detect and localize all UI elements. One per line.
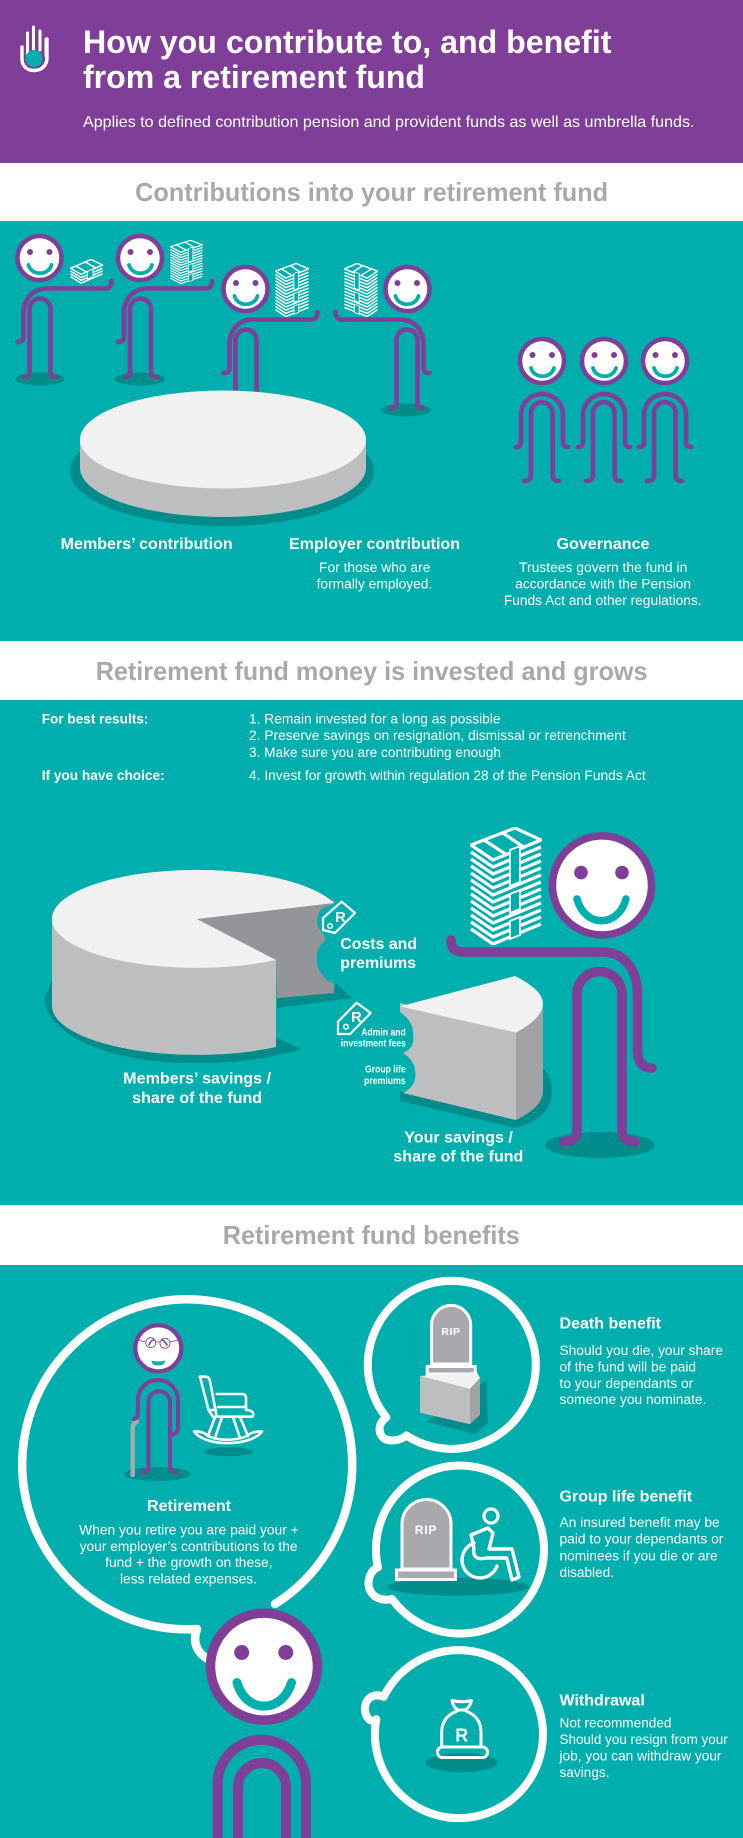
text: death benefit	[560, 1316, 723, 1407]
speech bubble: retirement	[22, 1299, 352, 1660]
label: governance: Funds Act and other regulations.	[504, 593, 702, 608]
person: employer two with money stack	[336, 263, 431, 416]
speech bubble: withdrawal	[365, 1650, 543, 1818]
label: governance: accordance with the Pension	[515, 576, 691, 592]
title: How you contribute to, and benefit	[83, 24, 612, 60]
chart: fund disk	[70, 390, 374, 526]
label: costs and premiums: Costs and	[340, 936, 417, 953]
text: withdrawal: Not recommended	[560, 1715, 672, 1730]
tips list: 1. Remain invested for a long as possible	[249, 712, 500, 726]
text: withdrawal: job, you can withdraw your	[558, 1749, 722, 1764]
label: group life premiums: premiums	[364, 1076, 406, 1087]
text: withdrawal: Should you resign from your	[560, 1732, 728, 1747]
governance trustees	[516, 339, 691, 481]
text: retirement: When you retire you are paid your +	[79, 1522, 299, 1537]
icon: price tag two	[338, 1003, 371, 1034]
label: group life premiums: Group life	[365, 1065, 406, 1076]
tips list: If you have choice:	[42, 767, 165, 783]
text: retirement: your employer’s contributions to the	[80, 1539, 298, 1554]
person: employer one with money stack	[224, 263, 318, 408]
speech bubble: group life benefit	[369, 1466, 544, 1634]
icon: tombstone and wheelchair	[388, 1499, 529, 1596]
icon: price tag one: R	[335, 909, 346, 926]
text: group life benefit: nominees if you die or are	[560, 1548, 718, 1563]
panel: investment	[0, 700, 743, 1205]
title	[83, 24, 612, 95]
icon: hand logo	[22, 27, 47, 70]
retired person	[124, 1325, 190, 1481]
text: withdrawal	[558, 1692, 728, 1780]
text: group life benefit: paid to your dependants or	[560, 1532, 724, 1547]
text: retirement: fund + the growth on these,	[105, 1555, 272, 1570]
label: governance	[504, 536, 702, 608]
label: members' savings: share of the fund	[132, 1090, 262, 1107]
text: group life benefit	[560, 1488, 724, 1580]
icon: tombstone and wheelchair: RIP	[415, 1523, 437, 1537]
label: your savings: Your savings /	[404, 1130, 513, 1147]
text: withdrawal: savings.	[560, 1765, 610, 1780]
heading: benefits: Retirement fund benefits	[223, 1220, 520, 1250]
label: governance: Governance	[556, 536, 650, 553]
text: retirement	[79, 1498, 299, 1587]
label: members' savings	[123, 1070, 272, 1107]
label: costs and premiums: premiums	[340, 955, 416, 972]
label: admin and investment fees: Admin and	[361, 1028, 406, 1038]
chart: members' savings pie	[44, 870, 352, 1063]
speech bubble: death benefit	[368, 1281, 536, 1449]
label: employer contribution	[289, 536, 460, 592]
tips list	[42, 710, 646, 783]
person: large narrator	[210, 1613, 318, 1838]
label: members' savings: Members’ savings /	[123, 1070, 272, 1088]
label: group life premiums	[364, 1065, 406, 1087]
text: group life benefit: disabled.	[560, 1565, 614, 1580]
text: death benefit: someone you nominate.	[560, 1392, 706, 1407]
text: group life benefit: Group life benefit	[560, 1488, 693, 1506]
label: governance: Trustees govern the fund in	[519, 560, 687, 575]
text: group life benefit: An insured benefit may be	[560, 1515, 720, 1530]
person: member two with money stack	[115, 236, 212, 386]
panel: contributions	[0, 221, 743, 641]
label: admin and investment fees: investment fees	[341, 1038, 406, 1049]
icon: money bag: R	[455, 1726, 468, 1746]
icon: price tag one	[323, 902, 355, 933]
person: member one with small money stack	[15, 236, 112, 386]
label: admin and investment fees	[341, 1028, 406, 1049]
tips list: 3. Make sure you are contributing enough	[249, 745, 501, 760]
text: withdrawal: Withdrawal	[560, 1692, 645, 1709]
text: retirement: Retirement	[147, 1498, 232, 1515]
label: costs and premiums	[340, 936, 417, 972]
icon: price tag two: R	[351, 1009, 362, 1026]
text: death benefit: Death benefit	[560, 1316, 662, 1332]
label: members contribution: Members’ contribution	[61, 536, 233, 553]
subtitle: Applies to defined contribution pension and provident funds as well as umbrella funds.	[83, 114, 694, 131]
icon: tombstone on fund wedge	[420, 1305, 488, 1434]
chart: your savings wedge	[400, 976, 552, 1128]
label: your savings	[393, 1130, 523, 1166]
person: large with money stack	[451, 828, 655, 1158]
header banner	[0, 0, 743, 163]
label: employer contribution: For those who are	[319, 560, 430, 575]
text: retirement: less related expenses.	[120, 1572, 257, 1587]
heading: invested: Retirement fund money is invested and grows	[96, 656, 647, 686]
tips list: For best results:	[42, 710, 148, 726]
icon: rocking chair	[194, 1377, 262, 1456]
heading: contributions: Contributions into your retirement fund	[135, 177, 608, 207]
label: employer contribution: formally employed.	[317, 576, 432, 592]
label: your savings: share of the fund	[393, 1149, 523, 1166]
text: death benefit: to your dependants or	[560, 1376, 694, 1391]
text: death benefit: of the fund will be paid	[560, 1359, 696, 1374]
label: employer contribution: Employer contribution	[289, 536, 460, 553]
tips list: 4. Invest for growth within regulation 28 of the Pension Funds Act	[249, 768, 646, 783]
icon: tombstone on fund wedge: RIP	[441, 1326, 461, 1338]
title: from a retirement fund	[83, 59, 425, 95]
panel: benefits	[0, 1265, 743, 1838]
text: death benefit: Should you die, your share	[560, 1343, 723, 1358]
tips list: 2. Preserve savings on resignation, dismissal or retrenchment	[249, 728, 626, 743]
icon: money bag	[426, 1700, 498, 1772]
